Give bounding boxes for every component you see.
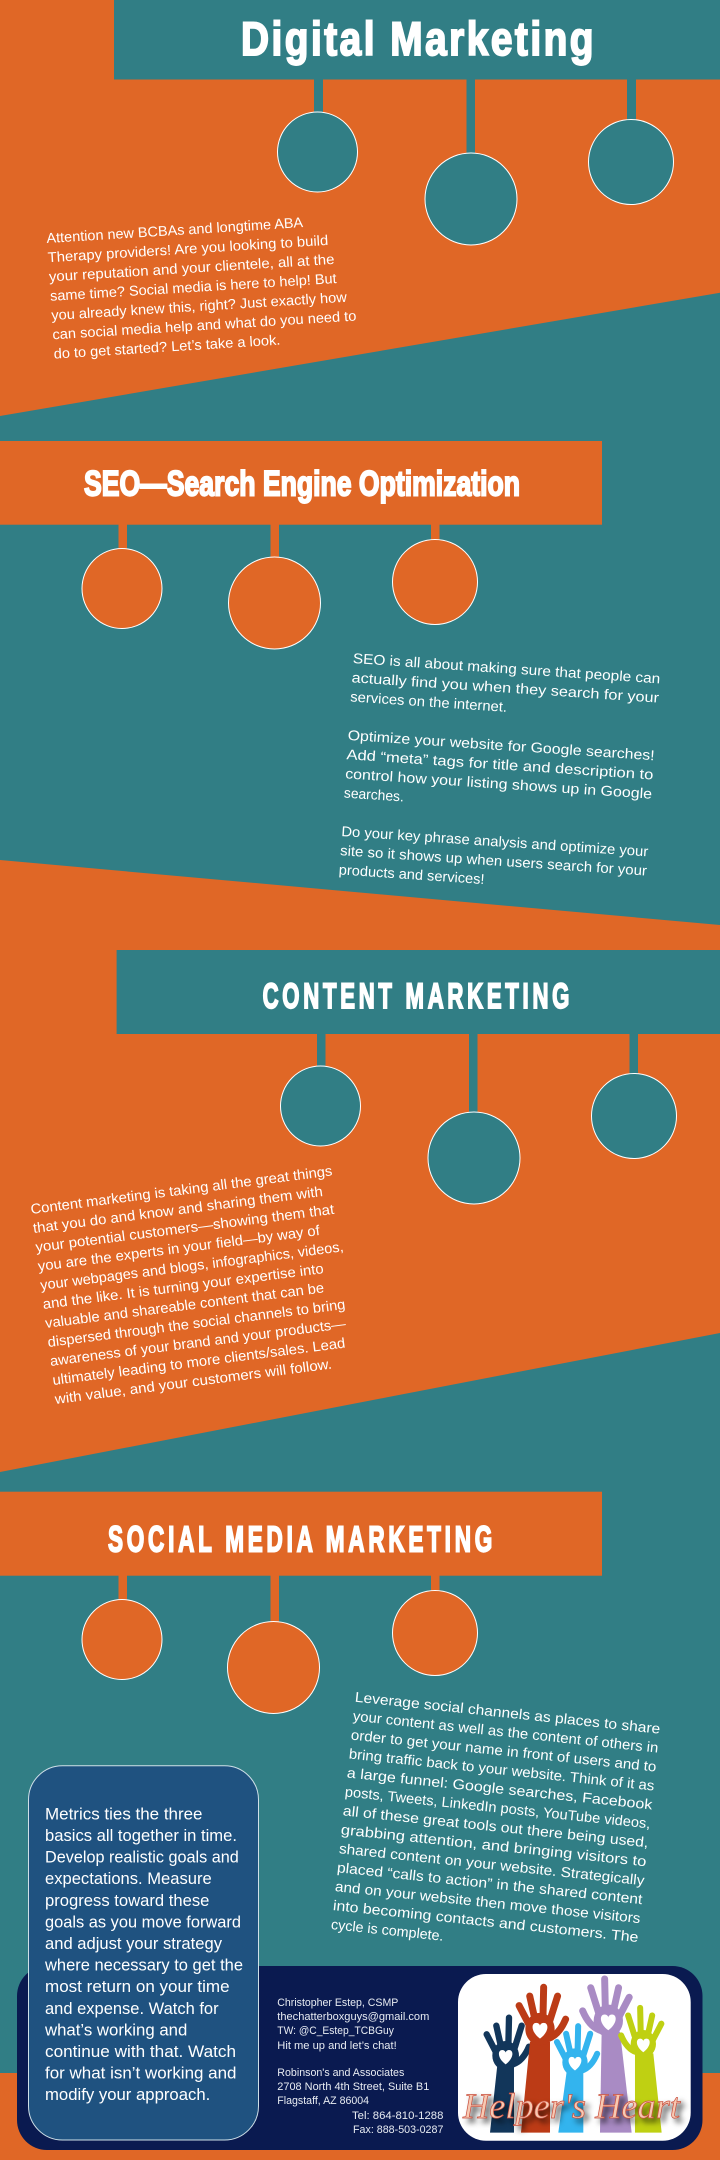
- callout: metrics: most return on your time: [45, 1978, 230, 1996]
- panel: SEO: [0, 441, 661, 899]
- intro text: do to get started? Let’s take a look.: [53, 333, 281, 363]
- heading bar: Social Media Marketing: SOCIAL MEDIA MARKETING: [108, 1518, 496, 1560]
- content marketing text: with value, and your customers will follow.: [53, 1357, 333, 1408]
- circle node 2: [428, 1034, 520, 1204]
- heading bar: Digital Marketing: [114, 0, 720, 80]
- intro text: Attention new BCBAs and longtime ABA: [46, 215, 304, 247]
- contact details: Hit me up and let’s chat!: [277, 2040, 397, 2052]
- callout: metrics: goals as you move forward: [45, 1913, 241, 1931]
- SEO text: Do your key phrase analysis and optimize your: [341, 824, 649, 860]
- content marketing text: that you do and know and sharing them with: [32, 1184, 324, 1237]
- panel: social media marketing: [0, 1492, 662, 1965]
- callout: metrics: [28, 1766, 258, 2140]
- social media text: Leverage social channels as places to share: [354, 1690, 661, 1738]
- icon: navy hand: [487, 2018, 529, 2133]
- panel: content marketing: [29, 950, 720, 1408]
- intro text: can social media help and what do you need to: [52, 308, 357, 343]
- contact details: Fax: 888-503-0287: [353, 2124, 443, 2136]
- icon: blue hand: [557, 2026, 597, 2133]
- social media text: placed “calls to action” in the shared content: [336, 1860, 643, 1908]
- circle node 2: [228, 1575, 320, 1714]
- contact details: Christopher Estep, CSMP: [277, 1997, 398, 2009]
- social media text: your content as well as the content of others in: [352, 1709, 659, 1757]
- callout: metrics: modify your approach.: [45, 2086, 210, 2104]
- contact details: Robinson's and Associates: [277, 2067, 405, 2079]
- social media text: a large funnel: Google searches, Facebook: [346, 1765, 654, 1814]
- contact details: Flagstaff, AZ 86004: [277, 2095, 369, 2107]
- SEO text: SEO is all about making sure that people can: [352, 651, 661, 687]
- intro text: same time? Social media is here to help! But: [50, 271, 337, 305]
- callout: metrics: continue with that. Watch: [45, 2043, 236, 2061]
- callout: metrics: Develop realistic goals and: [45, 1849, 239, 1867]
- contact details: [277, 1997, 443, 2136]
- circle node 1: [82, 1575, 162, 1680]
- callout: metrics: basics all together in time.: [45, 1827, 237, 1845]
- content marketing text: valuable and shareable content that can be: [44, 1280, 325, 1332]
- content marketing text: your potential customers—showing them that: [35, 1202, 335, 1256]
- SEO text: actually find you when they search for your: [351, 670, 660, 707]
- content marketing text: dispersed through the social channels to bring: [47, 1297, 346, 1351]
- SEO text: services on the internet.: [350, 689, 507, 716]
- contact details: thechatterboxguys@gmail.com: [277, 2011, 429, 2023]
- callout: metrics: Metrics ties the three: [45, 1805, 202, 1823]
- logo: Helper's Heart: Helper's Heart: [462, 2086, 681, 2126]
- SEO text: control how your listing shows up in Google: [345, 766, 653, 803]
- contact details: 2708 North 4th Street, Suite B1: [277, 2081, 429, 2093]
- callout: metrics: for what isn’t working and: [45, 2065, 236, 2083]
- heading bar: SEO: SEO—Search Engine Optimization: [84, 465, 520, 504]
- circle node 2: [228, 524, 320, 649]
- callout: metrics: and expense. Watch for: [45, 2000, 219, 2018]
- social media text: grabbing attention, and bringing visitors to: [340, 1822, 647, 1870]
- circle node 3: [392, 1575, 478, 1676]
- panel: footer bar: [17, 1966, 702, 2150]
- icon: red hand: [519, 1987, 566, 2133]
- content marketing text: Content marketing is taking all the great things: [30, 1163, 333, 1218]
- social media text: order to get your name in front of users and to: [350, 1728, 657, 1776]
- heading bar: Social Media Marketing: [0, 1492, 602, 1576]
- contact details: Tel: 864-810-1288: [352, 2110, 443, 2122]
- circle node 1: [280, 1034, 360, 1146]
- SEO text: site so it shows up when users search for your: [340, 843, 648, 880]
- social media text: cycle is complete.: [330, 1917, 444, 1945]
- social media text: all of these great tools out there being used,: [342, 1803, 649, 1851]
- content marketing text: [29, 1163, 359, 1408]
- heading bar: Content Marketing: [117, 950, 720, 1034]
- icon: green hand: [621, 2008, 662, 2133]
- circle node 1: [278, 79, 358, 192]
- content marketing text: awareness of your brand and your products—: [49, 1316, 348, 1370]
- intro text: you already knew this, right? Just exactly how: [51, 290, 348, 324]
- contact details: TW: @C_Estep_TCBGuy: [277, 2025, 394, 2037]
- callout: metrics: and adjust your strategy: [45, 1935, 223, 1953]
- circle node 2: [425, 79, 517, 245]
- SEO text: Optimize your website for Google searches!: [347, 728, 655, 764]
- callout: metrics: expectations. Measure: [45, 1870, 212, 1888]
- content marketing text: ultimately leading to more clients/sales. Lead: [52, 1336, 346, 1389]
- icon: purple hand: [583, 1979, 632, 2133]
- circle node 3: [392, 524, 478, 624]
- SEO text: searches.: [343, 786, 404, 805]
- heading bar: SEO: [0, 441, 602, 525]
- callout: metrics: what’s working and: [44, 2021, 187, 2039]
- SEO text: products and services!: [338, 862, 485, 888]
- circle node 1: [82, 524, 162, 628]
- SEO text: [338, 651, 661, 899]
- intro text: Therapy providers! Are you looking to build: [47, 233, 329, 266]
- social media text: bring traffic back to your website. Think of it as: [348, 1747, 655, 1795]
- social media text: [330, 1690, 662, 1965]
- intro text: [46, 212, 358, 363]
- logo: Helper's Heart: [458, 1974, 691, 2141]
- callout: metrics: where necessary to get the: [44, 1957, 243, 1975]
- content marketing text: your webpages and blogs, infographics, videos,: [39, 1239, 344, 1294]
- social media text: and on your website then move those visitors: [334, 1879, 641, 1927]
- social media text: posts, Tweets, LinkedIn posts, YouTube videos,: [344, 1784, 651, 1832]
- circle node 3: [592, 1034, 676, 1158]
- SEO text: Add “meta” tags for title and description to: [346, 747, 654, 783]
- callout: metrics: progress toward these: [45, 1892, 209, 1910]
- heading bar: Digital Marketing: Digital Marketing: [241, 12, 596, 65]
- content marketing text: you are the experts in your field—by way of: [37, 1223, 321, 1275]
- panel: digital marketing intro: [46, 0, 720, 363]
- intro text: your reputation and your clientele, all at the: [48, 252, 335, 286]
- social media text: shared content on your website. Strategically: [338, 1841, 646, 1889]
- circle node 3: [588, 79, 674, 204]
- social media text: into becoming contacts and customers. The: [332, 1898, 639, 1946]
- content marketing text: and the like. It is turning your expertise into: [42, 1261, 325, 1313]
